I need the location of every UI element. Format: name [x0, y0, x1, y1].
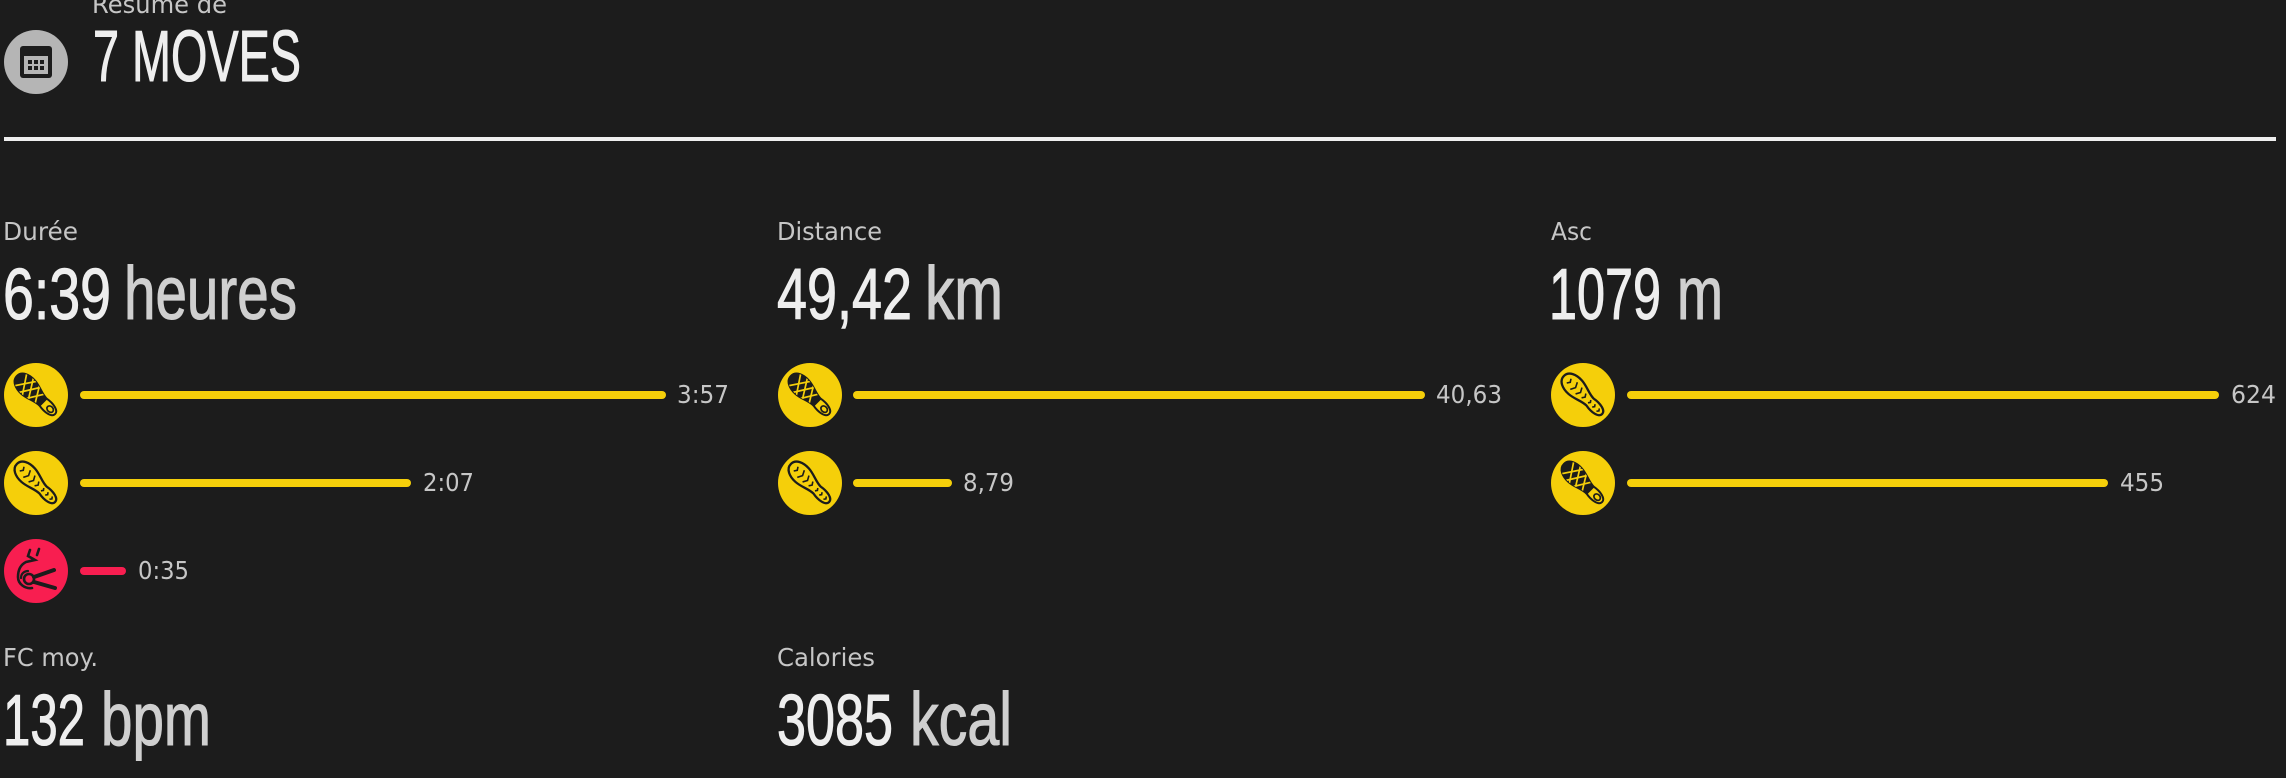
- value: 1079 m: 1079: [1549, 255, 1661, 335]
- panel: calories: [777, 643, 1012, 761]
- panel: durée: [3, 217, 729, 603]
- row: trail 40,63: [778, 363, 1502, 427]
- row: road 624: [1551, 363, 2276, 427]
- value: 3085 kcal: [777, 677, 1012, 761]
- value: 1079 m: m: [1677, 251, 1723, 335]
- value: 132 bpm: 132: [3, 681, 85, 761]
- label: fc moy: FC moy.: [3, 643, 98, 672]
- label: distance: Distance: [777, 217, 882, 246]
- panel: fc moy: [3, 643, 211, 761]
- value: 6:39 heures: 6:39: [3, 255, 111, 335]
- row: trail 455: 455: [2120, 468, 2164, 497]
- label: durée: Durée: [3, 217, 78, 246]
- value: 132 bpm: [3, 677, 211, 761]
- row: road 2:07: 2:07: [423, 468, 474, 497]
- value: 6:39 heures: [3, 251, 297, 335]
- panel: asc: [1549, 217, 2276, 515]
- value: 49,42 km: km: [925, 251, 1003, 335]
- row: road 2:07: [4, 451, 474, 515]
- row: trail 40,63: 40,63: [1436, 380, 1502, 409]
- label: asc: Asc: [1551, 217, 1592, 246]
- value: 3085 kcal: 3085: [777, 681, 893, 761]
- value: 3085 kcal: kcal: [910, 677, 1012, 761]
- row: trail 3:57: [4, 363, 729, 427]
- panel: distance: [777, 217, 1502, 515]
- row: cycling 0:35: [4, 539, 189, 603]
- row: road 8,79: [778, 451, 1014, 515]
- icon: calendar: [4, 30, 68, 94]
- row: cycling 0:35: 0:35: [138, 556, 189, 585]
- value: 132 bpm: bpm: [101, 677, 211, 761]
- value: 49,42 km: 49,42: [777, 255, 912, 335]
- value: 6:39 heures: heures: [124, 251, 297, 335]
- label: calories: Calories: [777, 643, 875, 672]
- row: trail 455: [1551, 451, 2164, 515]
- row: road 8,79: 8,79: [963, 468, 1014, 497]
- title: 7 MOVES: [93, 17, 301, 97]
- row: road 624: 624: [2231, 380, 2276, 409]
- row: trail 3:57: 3:57: [677, 380, 729, 409]
- header: [4, 0, 301, 97]
